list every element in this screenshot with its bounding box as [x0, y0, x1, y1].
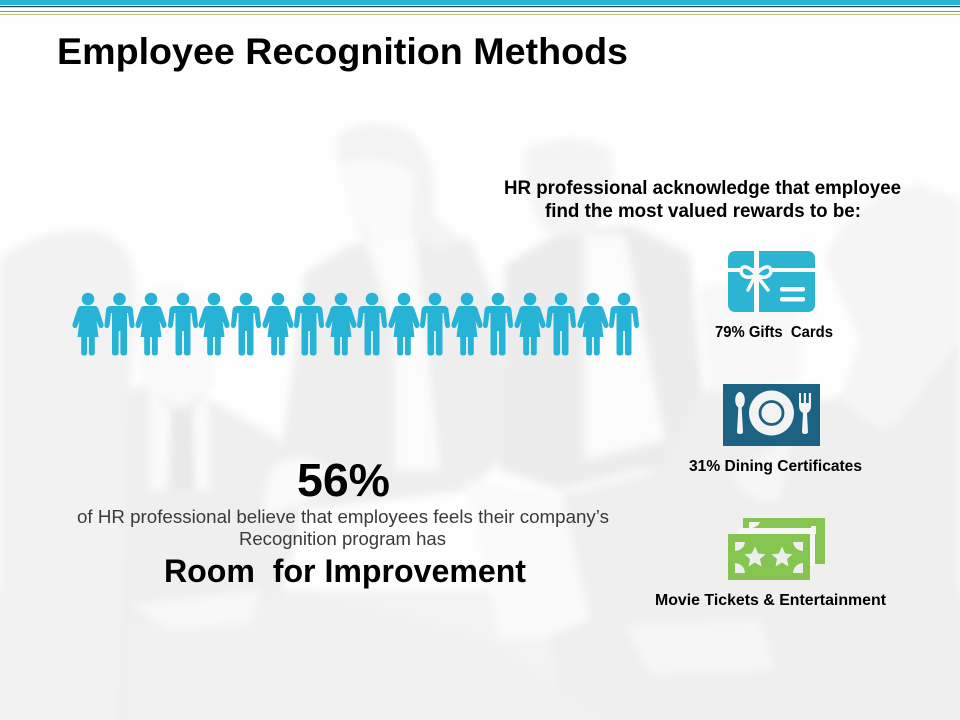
statistic description	[77, 507, 609, 549]
row of people icons	[72, 293, 639, 356]
rewards heading	[504, 177, 901, 222]
title: Employee Recognition Methods	[57, 31, 628, 72]
56 percent figure: 56%	[297, 454, 390, 506]
statistic description: of HR professional believe that employees feels their company’s	[77, 507, 609, 527]
rewards heading: find the most valued rewards to be:	[545, 200, 861, 222]
room for improvement: Room for Improvement	[164, 553, 526, 589]
top header stripes	[0, 0, 960, 15]
statistic text block	[77, 454, 609, 589]
icon: dining plate	[723, 384, 820, 446]
label: dining certificates: 31% Dining Certificates	[689, 458, 862, 475]
icon: gift card	[728, 251, 815, 312]
icon: movie tickets	[728, 518, 825, 580]
statistic description: Recognition program has	[239, 529, 446, 549]
label: gift cards: 79% Gifts Cards	[715, 324, 833, 341]
label: movie tickets: Movie Tickets & Entertainment	[655, 592, 887, 609]
rewards heading: HR professional acknowledge that employee	[504, 177, 901, 199]
